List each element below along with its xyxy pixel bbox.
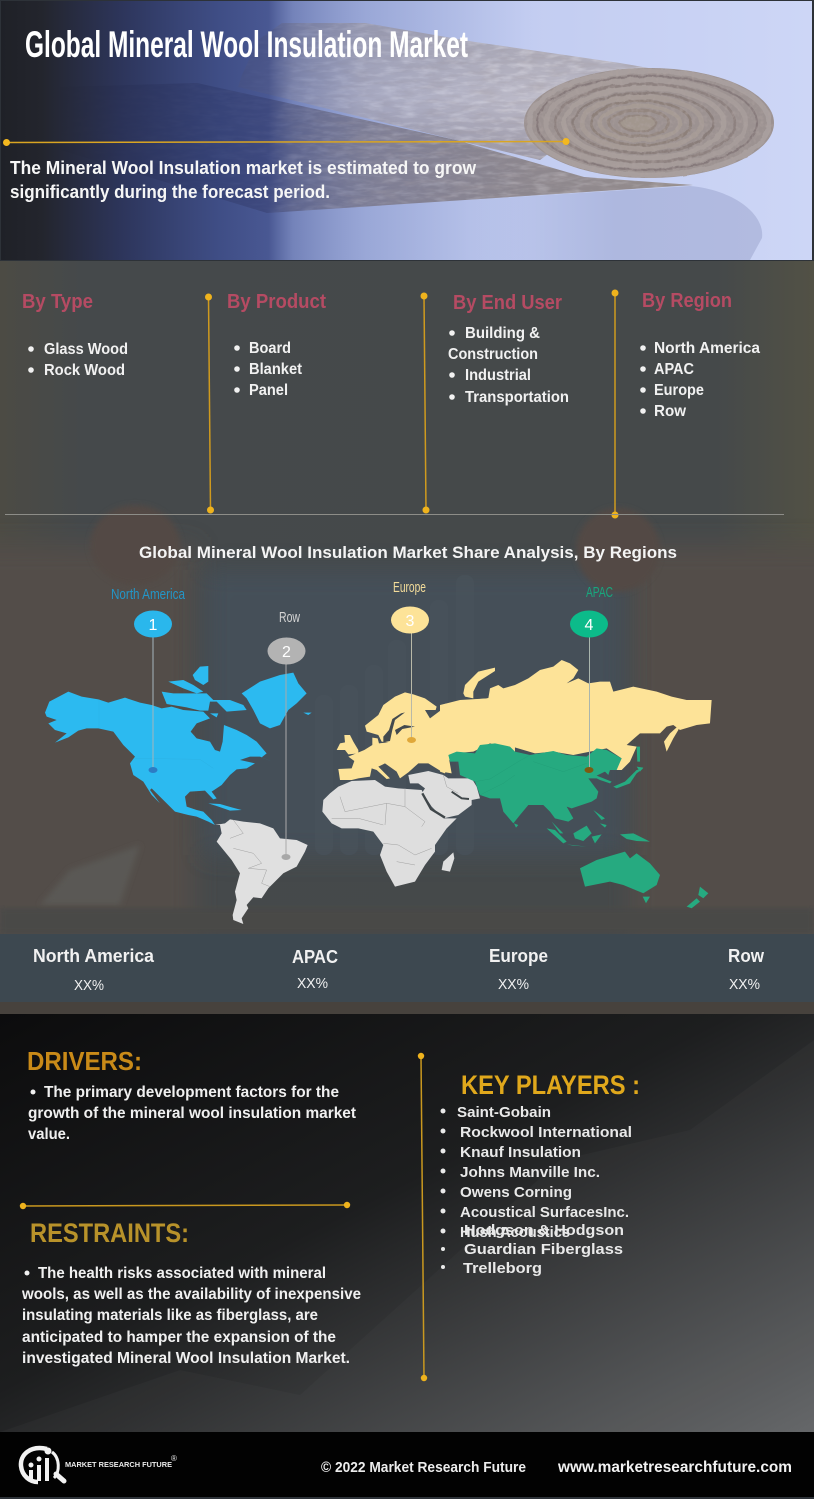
heading: by region: By Region	[642, 290, 732, 312]
share: europe	[489, 946, 548, 993]
list: regions: North America	[654, 340, 760, 357]
panel: by type	[22, 291, 128, 379]
pin 2: row	[268, 609, 306, 860]
pin 4: apac: APAC	[586, 584, 613, 601]
logo wordmark: ®	[171, 1454, 177, 1463]
map: russia and north asia	[440, 660, 712, 773]
pin 4: apac: 4	[585, 617, 594, 634]
hero description: The Mineral Wool Insulation market is estimated to grow	[10, 158, 477, 178]
text: restraints: insulating materials like as fiberglass, are	[22, 1307, 318, 1324]
share: north america: XX%	[74, 977, 104, 994]
list: regions	[640, 340, 760, 420]
heading: restraints: RESTRAINTS:	[30, 1218, 189, 1248]
list: products	[234, 340, 303, 399]
hero description	[10, 158, 477, 202]
text: restraints: The health risks associated with mineral	[38, 1265, 326, 1282]
list: end users: Construction	[448, 346, 538, 363]
map: asia pacific	[448, 743, 708, 908]
share: north america: North America	[33, 946, 155, 966]
panel: by end user	[448, 292, 569, 406]
heading: by type: By Type	[22, 291, 93, 313]
pin 1: north america: 1	[149, 617, 158, 634]
list: key players: Hush Acoustics	[460, 1224, 570, 1241]
list: types	[28, 341, 128, 379]
divider: end user and region	[612, 290, 618, 518]
list: products: Panel	[249, 382, 288, 399]
share: apac	[292, 947, 338, 992]
text: drivers	[28, 1084, 357, 1143]
panel: hero banner	[1, 1, 812, 260]
share: row	[728, 946, 765, 993]
share: apac: APAC	[292, 947, 338, 967]
panel: drivers, restraints, key players	[0, 1014, 814, 1432]
share: europe: XX%	[498, 976, 529, 993]
text: restraints: investigated Mineral Wool Insulation Market.	[22, 1350, 350, 1367]
list: end users: Transportation	[465, 389, 569, 406]
pin 3: europe: Europe	[393, 579, 426, 596]
chart: world map by region	[45, 579, 712, 924]
share: europe: Europe	[489, 946, 548, 966]
list: key players: Rockwool International	[460, 1124, 632, 1141]
text: drivers: The primary development factors for the	[44, 1084, 339, 1101]
list: end users: Industrial	[465, 367, 531, 384]
text: restraints	[21, 1265, 361, 1367]
pin 2: row: 2	[282, 644, 291, 661]
list: key players: Trelleborg	[463, 1260, 542, 1277]
panel: by region	[640, 290, 760, 420]
gold divider	[20, 1202, 350, 1209]
list: regions: Row	[654, 403, 687, 420]
text: drivers: value.	[28, 1126, 70, 1143]
title: Global Mineral Wool Insulation Market	[25, 24, 468, 65]
pin 1: north america	[111, 586, 186, 773]
panel: regional share band	[0, 934, 814, 1002]
divider: type and product	[205, 294, 214, 514]
share: row: Row	[728, 946, 765, 966]
icon: market research future logo	[21, 1448, 64, 1482]
heading: drivers: DRIVERS:	[27, 1046, 142, 1076]
share: north america	[33, 946, 155, 994]
map: africa and middle east	[322, 771, 480, 887]
list: key players: Owens Corning	[460, 1184, 572, 1201]
map: north america	[45, 666, 312, 825]
map: europe	[337, 668, 515, 780]
pin 1: north america: North America	[111, 586, 186, 603]
copyright: © 2022 Market Research Future	[321, 1459, 526, 1476]
heading: by end user: By End User	[453, 292, 562, 314]
pin 4: apac	[570, 584, 613, 773]
list: regions: Europe	[654, 382, 704, 399]
list: products: Board	[249, 340, 291, 357]
gold divider	[3, 138, 570, 146]
share: row: XX%	[729, 976, 760, 993]
hero description: significantly during the forecast period.	[10, 182, 330, 202]
roll reflection	[470, 186, 762, 260]
website: www.marketresearchfuture.com	[557, 1459, 792, 1476]
text: drivers: growth of the mineral wool insulation market	[28, 1105, 357, 1122]
pin 3: europe: 3	[406, 613, 415, 630]
text: restraints: anticipated to hamper the expansion of the	[22, 1329, 336, 1346]
map: south america	[215, 819, 308, 924]
logo wordmark	[65, 1454, 177, 1469]
list: key players: Knauf Insulation	[460, 1144, 581, 1161]
list: end users: Building &	[465, 325, 540, 342]
panel: segmentation and map background	[0, 261, 814, 1002]
share: apac: XX%	[297, 975, 328, 992]
heading: market share analysis: Global Mineral Wool Insulation Market Share Analysis, By Regions	[139, 543, 677, 562]
icon: mineral wool roll	[161, 23, 774, 213]
vertical gold divider	[418, 1053, 427, 1381]
pin 2: row: Row	[279, 609, 300, 626]
list: end users	[448, 325, 569, 406]
list: types: Rock Wood	[44, 362, 125, 379]
pin 3: europe	[391, 579, 429, 743]
list: key players: Acoustical SurfacesInc.	[460, 1204, 629, 1221]
list: types: Glass Wood	[44, 341, 128, 358]
list: key players	[440, 1104, 632, 1277]
text: restraints: wools, as well as the availability of inexpensive	[21, 1286, 361, 1303]
divider: product and end user	[420, 292, 430, 514]
list: key players: Saint-Gobain	[457, 1104, 551, 1121]
list: key players: Guardian Fiberglass	[464, 1241, 623, 1258]
logo wordmark: MARKET RESEARCH FUTURE	[65, 1462, 172, 1469]
heading: key players: KEY PLAYERS :	[461, 1070, 640, 1100]
footer	[0, 1432, 814, 1497]
heading: by product: By Product	[227, 291, 326, 313]
list: products: Blanket	[249, 361, 303, 378]
list: key players: Hodgson & Hodgson	[464, 1222, 624, 1239]
list: key players: Johns Manville Inc.	[460, 1164, 600, 1181]
list: regions: APAC	[654, 361, 694, 378]
panel: by product	[227, 291, 326, 399]
